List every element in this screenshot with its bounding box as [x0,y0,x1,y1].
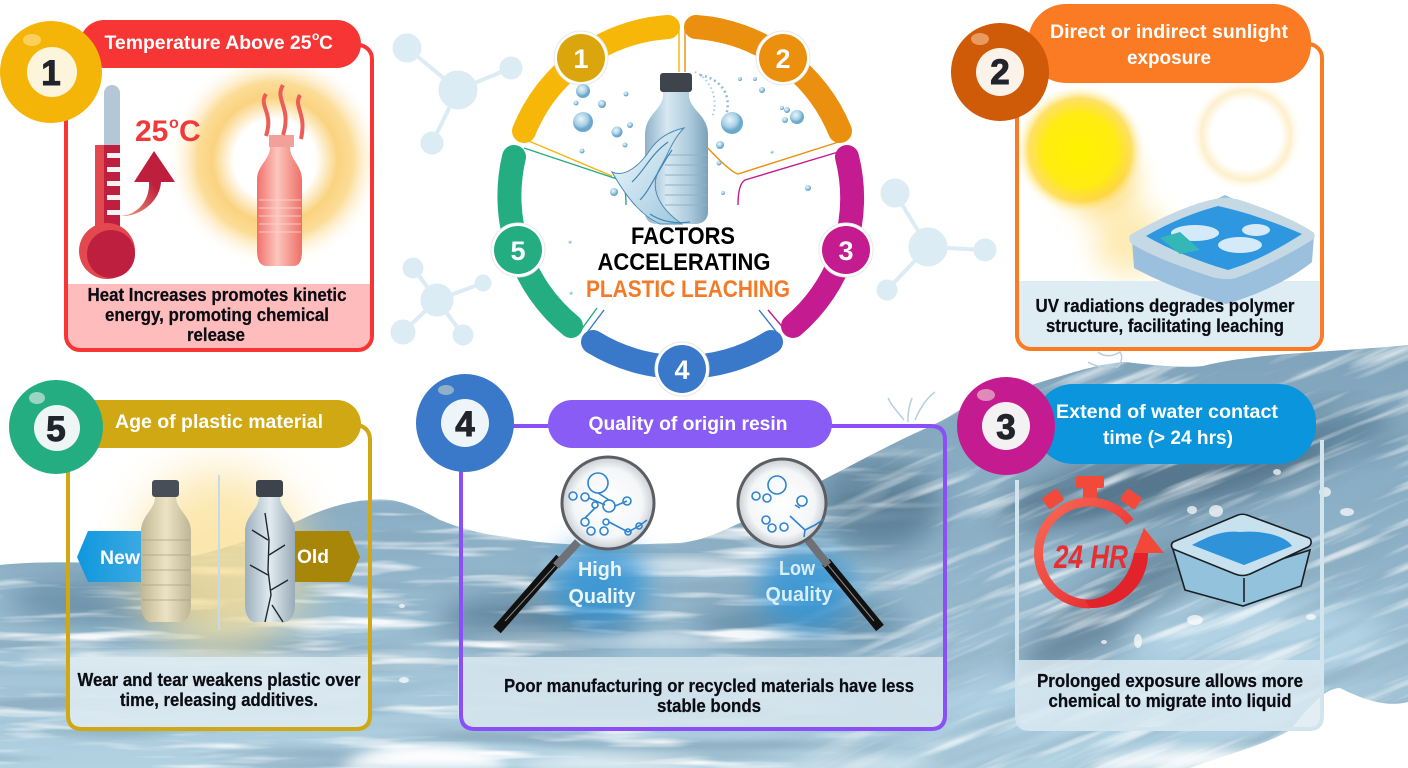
caption text 5 [78,670,360,710]
panel 2 frame [1017,44,1322,349]
number badge 4: 4 [455,405,475,444]
caption text 5: Wear and tear weakens plastic over [78,670,360,690]
molecule decoration upper [393,34,522,154]
old label: Old [297,547,329,568]
caption band 4 [458,657,946,727]
new label [77,531,160,582]
ring badge 2 [756,31,810,85]
high quality label: Quality [568,586,636,608]
icon: rising arrow [120,151,175,216]
ring badge 3 [819,223,873,277]
panel 3: water contact [957,377,1322,729]
number badge 1 [0,21,102,123]
sun left [1014,84,1166,276]
ring badge 1: 1 [573,44,589,74]
white foam at the bottom edge [340,744,1310,768]
ring badge 4 [655,342,709,396]
ring segment 4 [593,342,771,367]
sun right [1190,79,1302,191]
low quality label: Quality [766,584,833,606]
ring badge 1 [554,31,608,85]
number badge 4 [416,374,514,472]
low quality label: Low [779,558,815,580]
temperature label [135,115,201,148]
header 5: Age of plastic material [115,412,323,433]
ring badge 2: 2 [775,44,791,74]
header 4 [548,400,832,448]
header 4: Quality of origin resin [588,414,788,435]
ring segment 1 [524,27,668,131]
header 3: time (> 24 hrs) [1103,428,1233,449]
caption text 1: release [187,325,245,345]
caption text 2 [1036,296,1294,336]
blue glow high [552,543,648,627]
heat glow [167,52,383,268]
icon: stopwatch [1039,476,1164,608]
blue glow low [758,550,854,630]
ring segment 2 [696,27,840,131]
caption text 4: Poor manufacturing or recycled materials have less [504,676,914,696]
molecule decoration right [877,179,996,300]
caption text 2: structure, facilitating leaching [1046,316,1284,336]
center diagram: factor ring [491,25,873,396]
panel 1 frame [66,45,372,350]
number badge 3: 3 [996,408,1016,447]
icon: cracked old bottle [245,480,295,622]
header 2: Direct or indirect sunlight [1050,22,1289,43]
ring segment 5 [509,157,571,326]
panel 3 frame [1017,440,1322,729]
number badge 1: 1 [41,54,61,93]
caption band 3 [1017,660,1322,729]
icon: pool [1129,195,1315,304]
icon: water tub [1172,514,1311,606]
header 2: exposure [1127,48,1211,69]
temperature label: 25 [135,115,168,148]
ring badge 3: 3 [838,236,854,266]
new label: New [100,548,140,569]
ring segment 3 [793,157,852,326]
number badge 2: 2 [990,53,1010,92]
caption text 1 [88,285,346,345]
caption band 1 [68,284,370,349]
caption text 4: stable bonds [657,696,761,716]
ring badge 5: 5 [510,236,526,266]
title: PLASTIC LEACHING [586,276,790,303]
old label [280,531,360,582]
header 3 [1035,384,1316,464]
ring badge 4: 4 [674,355,690,385]
caption text 2: UV radiations degrades polymer [1036,296,1294,316]
panel 4: resin quality [416,374,946,729]
molecule decoration lower left [391,258,491,345]
divider [218,475,220,630]
header 1 [80,20,361,68]
caption text 3 [1037,671,1303,711]
water wave background [0,340,1408,768]
header 1: Temperature Above 25 [104,33,312,54]
caption band 2 [1019,281,1320,347]
caption text 3: chemical to migrate into liquid [1048,691,1292,711]
caption text 1: energy, promoting chemical [105,305,329,325]
warm glow [135,470,305,650]
header 1: o [312,29,319,43]
number badge 2 [951,23,1049,121]
connector lines [524,25,848,334]
panel 4 frame [461,426,945,729]
icon: water bottle with splash [568,72,811,294]
header 3: Extend of water contact [1056,402,1279,423]
title: ACCELERATING [598,249,770,276]
caption text 1: Heat Increases promotes kinetic [88,285,346,305]
caption text 5: time, releasing additives. [120,690,318,710]
panel 5: plastic age [9,380,370,729]
title: FACTORS [631,223,735,250]
temperature label: o [169,115,179,132]
number badge 5 [9,380,103,474]
high quality label [568,559,636,608]
caption band 5 [68,657,370,727]
ring badge 5 [491,223,545,277]
low quality label [766,558,833,606]
high quality label: High [578,559,622,581]
header 1: C [319,33,333,54]
caption text 3: Prolonged exposure allows more [1037,671,1303,691]
number badge 5: 5 [46,410,66,449]
header 2 [1028,4,1311,83]
title [586,223,790,303]
icon: thermometer [79,85,135,279]
icon: low quality magnifier [738,459,880,628]
panel 1: temperature [0,20,383,351]
panel 2: sunlight [951,4,1322,349]
icon: stopwatch: 24 HR [1053,539,1128,575]
caption text 4 [504,676,914,716]
number badge 3 [957,377,1055,475]
panel 5 frame [68,425,370,729]
icon: new bottle [141,480,191,622]
header 5 [85,400,361,448]
temperature label: C [179,115,201,148]
icon: high quality magnifier [497,457,654,630]
icon: hot bottle [257,85,303,266]
water bubbles and splashes [399,352,1354,683]
